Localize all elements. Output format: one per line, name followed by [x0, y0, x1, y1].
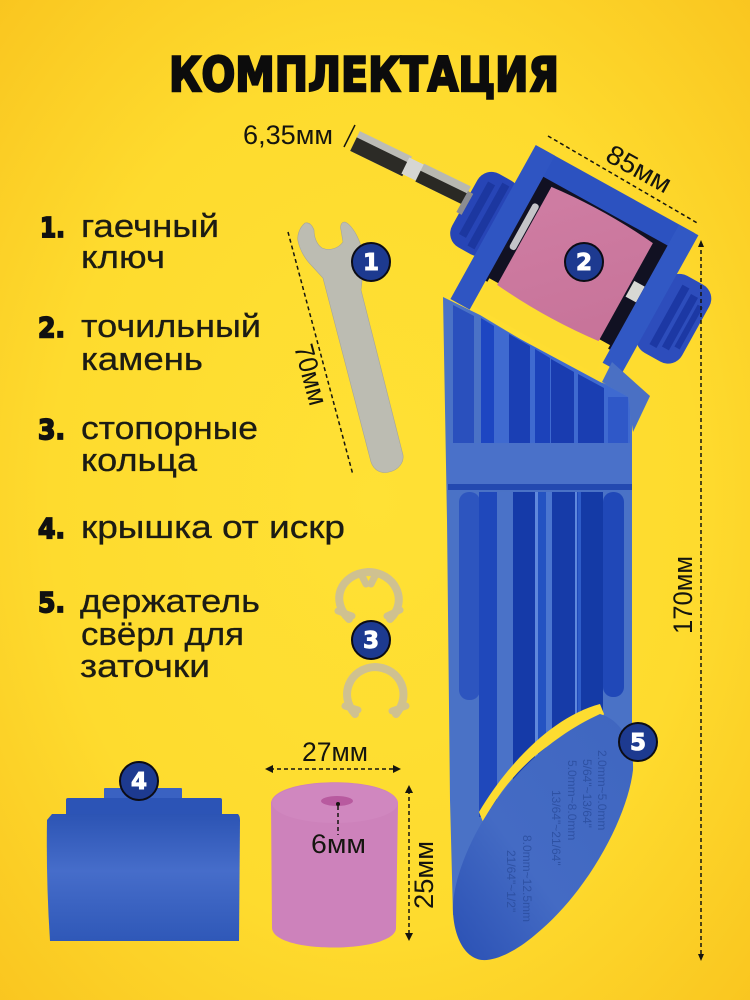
dimension: 6mm	[311, 802, 366, 859]
icon: wrench	[298, 222, 403, 473]
list item 2: камень	[81, 341, 203, 377]
dimension: 170mm	[668, 240, 704, 961]
dimension: 25mm: 25мм	[409, 841, 439, 909]
list item 5: свёрл для	[81, 616, 244, 652]
lower recess	[459, 492, 624, 817]
badge 2	[565, 243, 603, 281]
cross bar	[448, 443, 632, 490]
badge 2: 2	[576, 250, 592, 276]
stone bore	[321, 796, 353, 806]
disc engraving	[504, 750, 609, 922]
left knob	[442, 165, 525, 262]
badge 1	[352, 243, 390, 281]
window gap	[474, 278, 610, 373]
list item 3: стопорные	[81, 410, 258, 446]
badge 1: 1	[363, 250, 379, 276]
grinding stone	[496, 184, 654, 344]
frame top bar	[528, 147, 697, 255]
list item 3	[38, 410, 258, 478]
dimension: 85mm: 85мм	[601, 139, 677, 199]
badge 3: 3	[363, 628, 379, 654]
dimension: 25mm	[405, 785, 439, 941]
title: КОМПЛЕКТАЦИЯ	[169, 48, 559, 103]
icon: retaining clip top	[338, 572, 400, 619]
badge 5	[619, 723, 657, 761]
tool body	[443, 297, 632, 915]
badge 3	[352, 621, 390, 659]
head-to-body connector	[602, 362, 650, 432]
disc engraving: 5/64"~13/64"	[580, 759, 594, 828]
body outline	[443, 297, 632, 915]
icon: retaining clip bottom	[345, 667, 406, 714]
upper channels	[453, 305, 630, 443]
disc engraving: 13/64"~21/64"	[549, 790, 563, 866]
disc engraving: 21/64"~1/2"	[504, 850, 518, 912]
right knob	[631, 268, 717, 369]
cover part	[47, 788, 240, 941]
list item 5	[38, 583, 260, 684]
dimension: 170mm: 170мм	[668, 556, 698, 634]
list item 2: 2.	[38, 311, 65, 344]
disc engraving: 5.0mm~8.0mm	[565, 760, 579, 840]
dimension: 27mm	[265, 737, 401, 773]
list item 5: 5.	[38, 586, 65, 619]
list item 1: гаечный	[81, 208, 219, 244]
list item 2: точильный	[81, 308, 261, 344]
badge 4: 4	[131, 769, 147, 795]
dimension: 70mm: 70мм	[288, 341, 333, 408]
list item 1: ключ	[81, 239, 165, 275]
frame interior	[484, 175, 670, 351]
disc engraving: 2.0mm~5.0mm	[595, 750, 609, 830]
list item 5: держатель	[80, 583, 260, 619]
list item 3: кольца	[81, 442, 197, 478]
list item 4: 4.	[38, 512, 65, 545]
small grinding stone	[271, 782, 398, 948]
grinder head with stone	[418, 127, 737, 410]
disc engraving: 8.0mm~12.5mm	[520, 835, 534, 922]
badge 4	[120, 762, 158, 800]
list item 2	[38, 308, 261, 377]
dimension: 70mm	[288, 232, 353, 475]
dimension: 27mm: 27мм	[302, 737, 368, 767]
drill holder disc with angle scale	[453, 704, 633, 960]
list item 3: 3.	[38, 413, 65, 446]
parts list	[38, 208, 345, 684]
list item 1: 1.	[40, 211, 65, 244]
list item 1	[40, 208, 219, 275]
dimension: 6mm: 6мм	[311, 829, 366, 859]
frame right arm	[603, 225, 698, 373]
list item 5: заточки	[80, 648, 210, 684]
icon: hex bit shaft	[350, 131, 471, 205]
dimension: 6,35mm: 6,35мм	[243, 120, 333, 150]
frame left arm	[450, 145, 555, 310]
dimension: 85mm	[548, 136, 699, 224]
badge 5: 5	[630, 730, 646, 756]
list item 4: крышка от искр	[81, 509, 345, 545]
